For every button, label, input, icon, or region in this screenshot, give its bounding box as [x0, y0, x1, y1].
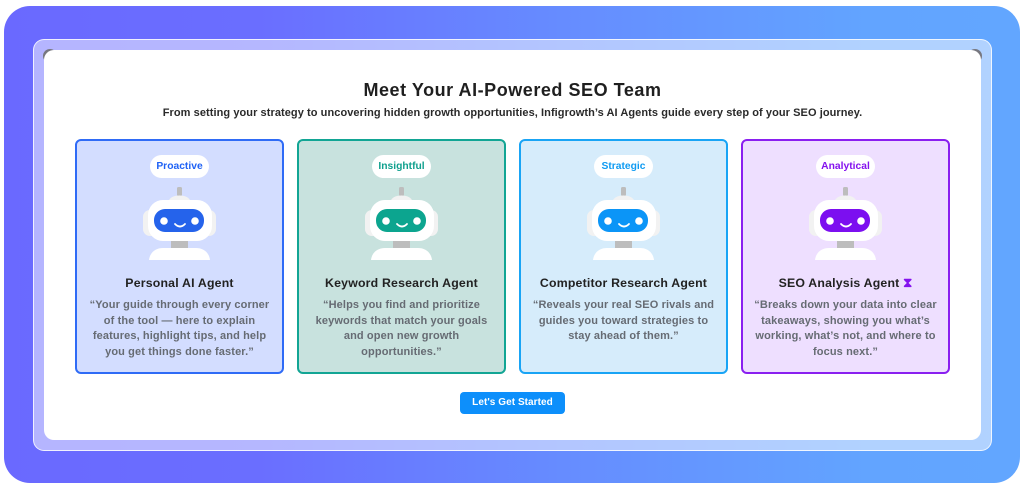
agent description: you get things done faster.” — [105, 346, 254, 358]
agent name: Competitor Research Agent — [540, 276, 707, 290]
agent name: SEO Analysis Agent ⧗ — [779, 275, 912, 290]
agent description: “Helps you find and prioritize — [323, 299, 480, 311]
agent description: “Reveals your real SEO rivals and — [533, 299, 714, 311]
icon: blue robot — [143, 187, 216, 260]
agent description: “Your guide through every corner — [90, 299, 269, 311]
title: Meet Your AI-Powered SEO Team — [363, 80, 662, 100]
agent description — [316, 299, 487, 358]
agent description: “Breaks down your data into clear — [754, 299, 937, 311]
badge: Strategic — [594, 155, 653, 178]
panel corner shadow right — [968, 49, 982, 63]
badge: Insightful: Insightful — [378, 161, 425, 172]
white content panel — [44, 50, 981, 440]
agent description: stay ahead of them.” — [568, 330, 679, 342]
subtitle: From setting your strategy to uncovering hidden growth opportunities, Infigrowth’s AI Agents guide every step of your SEO journey. — [163, 107, 862, 119]
icon: light blue robot — [587, 187, 660, 260]
agent description — [533, 299, 714, 342]
agent description: of the tool — here to explain — [104, 314, 255, 326]
panel: Competitor Research Agent — [519, 139, 728, 374]
agent description: opportunities.” — [361, 346, 442, 358]
panel: Personal AI Agent — [75, 139, 284, 374]
agent description — [754, 299, 937, 358]
agent description: takeaways, showing you what’s — [761, 314, 930, 326]
badge: Analytical: Analytical — [821, 161, 870, 172]
agent description: and open new growth — [344, 330, 459, 342]
button: Let's Get Started — [460, 392, 565, 414]
agent description: guides you toward strategies to — [539, 314, 708, 326]
agent description: features, highlight tips, and help — [93, 330, 266, 342]
agent description: keywords that match your goals — [316, 314, 487, 326]
icon: purple robot — [809, 187, 882, 260]
panel: SEO Analysis Agent — [741, 139, 950, 374]
panel: Keyword Research Agent — [297, 139, 506, 374]
badge: Proactive — [150, 155, 209, 178]
agent name: Keyword Research Agent — [325, 276, 478, 290]
agent description: focus next.” — [813, 346, 878, 358]
agent name: Personal AI Agent — [125, 276, 234, 290]
panel corner shadow left — [43, 49, 57, 63]
translucent frame — [33, 39, 992, 451]
badge: Analytical — [816, 155, 875, 178]
icon: teal robot — [365, 187, 438, 260]
badge: Strategic: Strategic — [601, 161, 646, 172]
badge: Insightful — [372, 155, 431, 178]
button: Let's Get Started: Let's Get Started — [472, 397, 553, 408]
agent description — [90, 299, 269, 358]
badge: Proactive: Proactive — [156, 161, 203, 172]
agent description: working, what’s not, and where to — [755, 330, 936, 342]
